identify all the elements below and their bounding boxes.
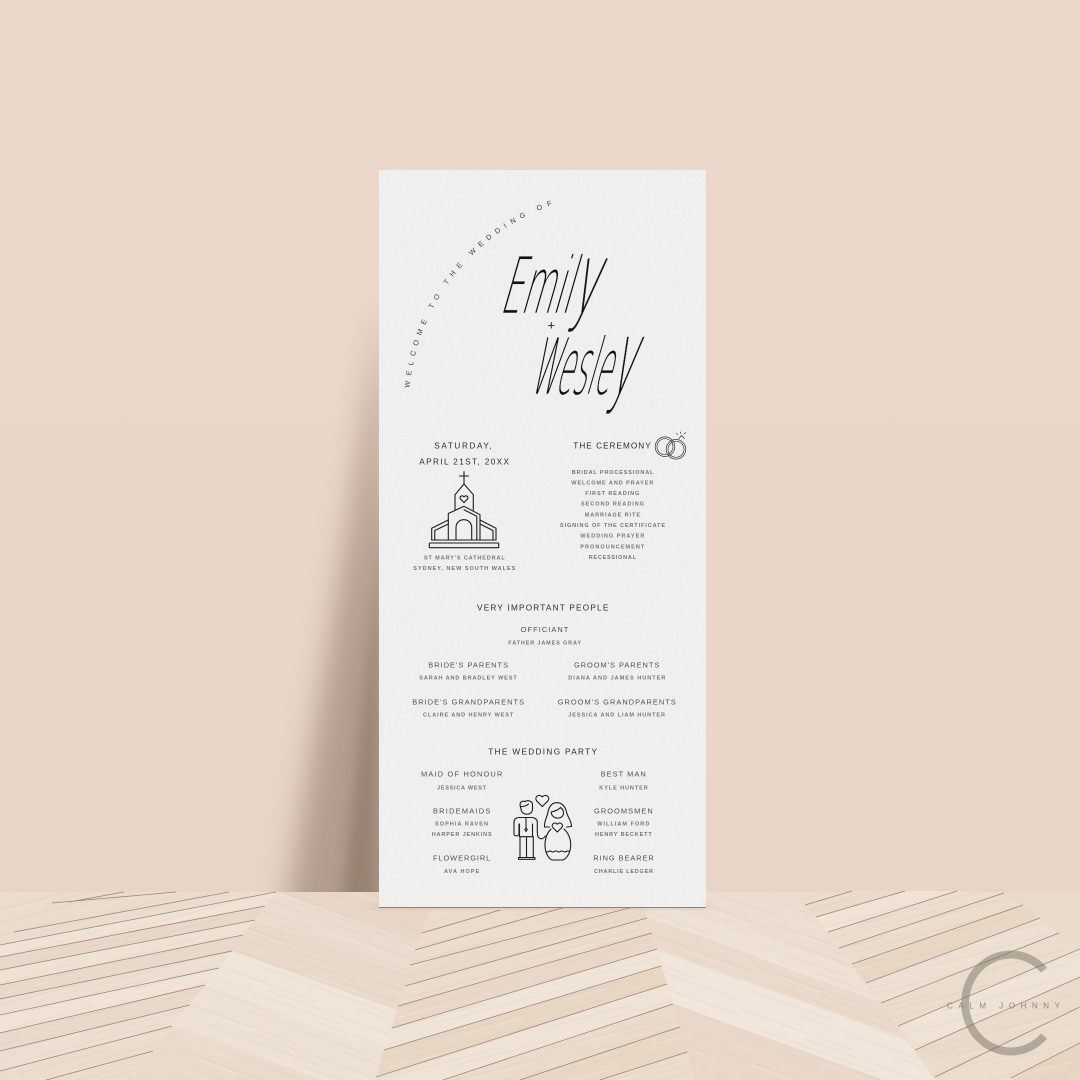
icon: bride and groom with heart xyxy=(514,795,572,860)
ceremony order list: FIRST READING xyxy=(585,491,639,497)
ceremony order list: WELCOME AND PRAYER xyxy=(571,480,653,486)
section: very important people: GROOM'S GRANDPARENTS xyxy=(558,698,676,707)
icon: wedding rings xyxy=(655,432,686,459)
section: the wedding party xyxy=(421,747,654,875)
section: the wedding party: SOPHIA RAVEN xyxy=(435,822,488,828)
ceremony order list: SIGNING OF THE CERTIFICATE xyxy=(560,523,665,529)
herringbone wood floor xyxy=(0,891,1080,1080)
section: very important people: BRIDE'S PARENTS xyxy=(428,660,508,669)
panel: wedding program card xyxy=(379,170,706,908)
section: very important people: CLAIRE AND HENRY WEST xyxy=(423,713,514,719)
section: the wedding party: BEST MAN xyxy=(601,770,646,779)
ceremony order list: RECESSIONAL xyxy=(589,555,637,561)
venue text: ST MARY'S CATHEDRAL xyxy=(424,555,505,561)
ceremony heading: THE CEREMONY xyxy=(573,441,651,450)
date block xyxy=(419,442,510,466)
venue text: SYDNEY, NEW SOUTH WALES xyxy=(413,566,516,572)
section: very important people: SARAH AND BRADLEY WEST xyxy=(419,676,517,682)
watermark: Calm Johnny logo: CALM JOHNNY xyxy=(947,1002,1061,1010)
ceremony order list: PRONOUNCEMENT xyxy=(580,544,645,550)
section: the wedding party: RING BEARER xyxy=(593,854,654,863)
ceremony order list: MARRIAGE RITE xyxy=(585,512,640,518)
section: very important people: FATHER JAMES GRAY xyxy=(508,641,581,647)
section: the wedding party: JESSICA WEST xyxy=(437,785,487,791)
section: the wedding party: THE WEDDING PARTY xyxy=(488,747,598,756)
ceremony order list: SECOND READING xyxy=(581,502,644,508)
ceremony order list xyxy=(560,470,665,561)
section: the wedding party: HENRY BECKETT xyxy=(595,832,652,838)
section: the wedding party: CHARLIE LEDGER xyxy=(594,869,653,875)
date block: SATURDAY, xyxy=(434,442,492,451)
section: very important people: BRIDE'S GRANDPARENTS xyxy=(412,698,524,707)
section: the wedding party: BRIDEMAIDS xyxy=(433,806,490,815)
date block: APRIL 21ST, 20XX xyxy=(419,457,510,466)
section: very important people: GROOM'S PARENTS xyxy=(574,660,659,669)
section: the wedding party: GROOMSMEN xyxy=(594,806,653,815)
names title: Emily xyxy=(492,220,621,337)
section: very important people: DIANA AND JAMES HUNTER xyxy=(568,676,665,682)
ceremony order list: BRIDAL PROCESSIONAL xyxy=(572,470,654,476)
section: the wedding party: WILLIAM FORD xyxy=(597,822,649,828)
icon: church xyxy=(429,472,499,548)
ceremony order list: WEDDING PRAYER xyxy=(580,534,644,540)
section: the wedding party: AVA HOPE xyxy=(444,869,480,875)
section: very important people xyxy=(412,604,676,719)
card shadow on wall xyxy=(283,300,385,930)
section: the wedding party: KYLE HUNTER xyxy=(599,785,648,791)
section: very important people: JESSICA AND LIAM HUNTER xyxy=(568,713,665,719)
watermark: Calm Johnny logo xyxy=(947,954,1061,1052)
section: very important people: OFFICIANT xyxy=(521,625,569,634)
venue text xyxy=(413,555,516,572)
section: the wedding party: MAID OF HONOUR xyxy=(421,770,502,779)
section: the wedding party: HARPER JENKINS xyxy=(432,832,492,838)
names title: + xyxy=(548,318,555,332)
names title xyxy=(492,220,658,420)
card floor contact shadow xyxy=(372,903,706,909)
names title: Wesley xyxy=(522,297,658,420)
arched welcome text: WELCOME TO THE WEDDING OF xyxy=(404,200,552,388)
section: very important people: VERY IMPORTANT PEOPLE xyxy=(477,604,609,613)
section: the wedding party: FLOWERGIRL xyxy=(433,854,490,863)
